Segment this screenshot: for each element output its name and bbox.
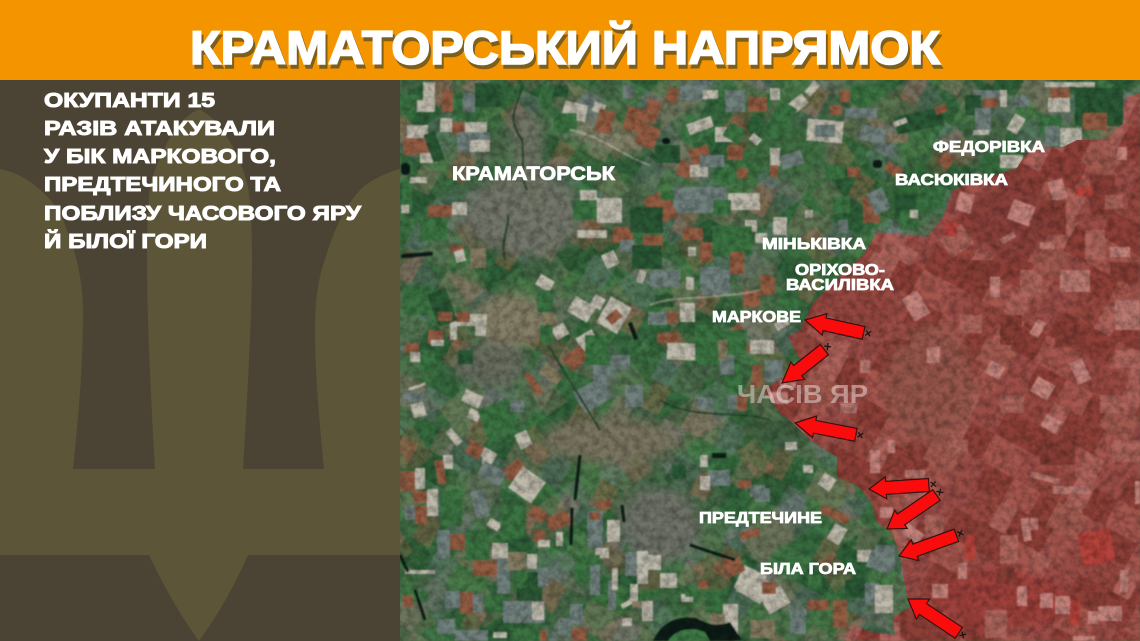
panel: left text background [0,80,400,641]
text block: summary: У БІК МАРКОВОГО, [44,145,276,168]
text block: summary: ОКУПАНТИ 15 [44,89,215,112]
text block: summary: ПРЕДТЕЧИНОГО ТА [44,173,281,196]
label: Markove: МАРКОВЕ [712,309,801,326]
header bar [0,0,1140,80]
arrow: attack toward Chasiv Yar north [775,337,837,392]
text block: summary: Й БІЛОЇ ГОРИ [44,229,207,253]
arrow: attack toward Bila Hora south [901,589,971,641]
label: Orikhovo-Vasylivka: ВАСИЛІВКА [786,277,895,294]
map: satellite imagery with occupied area [400,80,1140,641]
label: Orikhovo-Vasylivka: ОРІХОВО- [795,262,885,279]
arrow: attack toward Markove [803,309,873,345]
label: Orikhovo-Vasylivka [786,262,895,294]
text block: summary: ПОБЛИЗУ ЧАСОВОГО ЯРУ [44,202,361,225]
text block: summary [44,89,361,253]
label: Predtechyne: ПРЕДТЕЧИНЕ [699,510,822,527]
arrow: attack toward Predtechyne [881,482,948,538]
arrow: attack toward Bila Hora north [895,523,967,566]
icon: trident emblem [0,109,400,641]
title: КРАМАТОРСЬКИЙ НАПРЯМОК [192,25,942,78]
label: Chasiv Yar: ЧАСІВ ЯР [737,379,868,409]
title: КРАМАТОРСЬКИЙ НАПРЯМОК [190,21,940,74]
label: Fedorivka: ФЕДОРІВКА [933,139,1046,156]
label: Minkivka: МІНЬКІВКА [762,236,867,253]
label: Vasiukivka: ВАСЮКІВКА [895,172,1009,189]
map texture [400,80,1140,641]
arrow: attack toward Chasiv Yar south [793,412,865,447]
label: Bila Hora: БІЛА ГОРА [760,561,857,578]
occupied area: red overlay [740,80,1140,641]
map fields [400,80,1123,641]
text block: summary: РАЗІВ АТАКУВАЛИ [44,117,275,140]
arrow: attack toward Predtechyne north [868,474,937,500]
label: Kramatorsk: КРАМАТОРСЬК [452,163,615,185]
